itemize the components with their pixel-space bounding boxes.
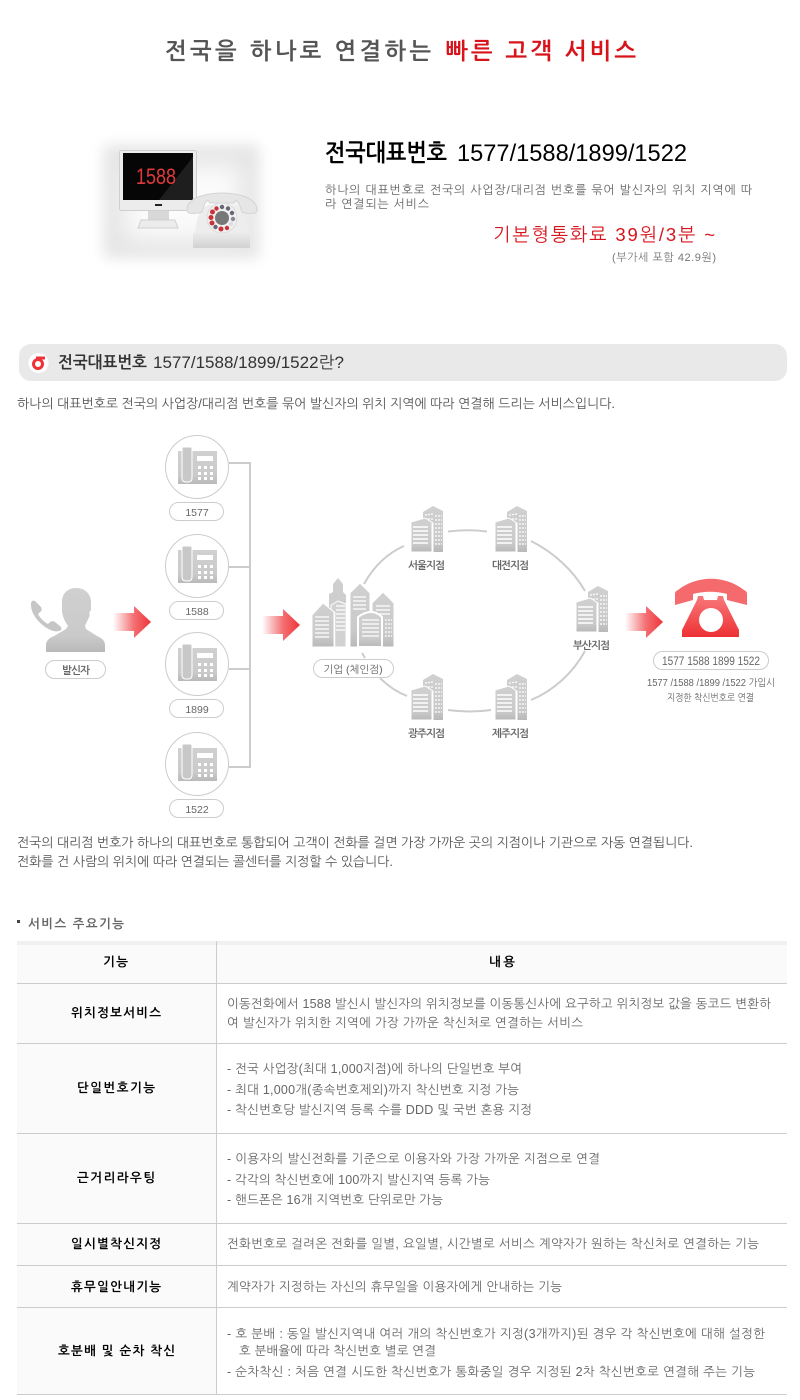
section intro: 하나의 대표번호로 전국의 사업장/대리점 번호를 묶어 발신자의 위치 지역에 따라 연결해 드리는 서비스입니다. [17, 396, 615, 411]
diagram explanation: 전국의 대리점 번호가 하나의 대표번호로 통합되어 고객이 전화를 걸면 가장 가까운 곳의 지점이나 기관으로 자동 연결됩니다. [17, 835, 693, 850]
diagram explanation [17, 835, 693, 869]
product description: 하나의 대표번호로 전국의 사업장/대리점 번호를 묶어 발신자의 위치 지역에 따 [325, 183, 752, 197]
branch: Jeju: 제주지점 [492, 727, 529, 740]
row: single number: - 착신번호당 발신지역 등록 수를 DDD 및 국번 혼용 지정 [227, 1103, 532, 1117]
icon: headquarters buildings [312, 578, 394, 647]
ring [362, 530, 585, 712]
branch: Seoul: 서울지점 [408, 559, 445, 572]
title: 전국을 하나로 연결하는 [165, 38, 431, 64]
row: location: 위치정보서비스 [71, 1006, 161, 1020]
row: location: 여 발신자가 위치한 지역에 가장 가까운 착신처로 연결하는 서비스 [227, 1016, 583, 1030]
phone 1588: 1588 [185, 606, 209, 618]
row: routing: 근거리라우팅 [77, 1171, 155, 1185]
row: single number: - 전국 사업장(최대 1,000지점)에 하나의 단일번호 부여 [227, 1062, 522, 1076]
branch: Daejeon [492, 506, 529, 572]
number pill: 1577 1588 1899 1522 [662, 656, 760, 668]
row: routing: - 핸드폰은 16개 지역번호 단위로만 가능 [227, 1193, 443, 1207]
phone 1899 [166, 632, 228, 718]
arrow [625, 606, 663, 638]
row: location: 이동전화에서 1588 발신시 발신자의 위치정보를 이동통신사에 요구하고 위치정보 값을 동코드 변환하 [227, 997, 771, 1011]
phone 1899: 1899 [185, 704, 209, 716]
table header [103, 955, 515, 969]
row: schedule: 일시별착신지정 [71, 1237, 161, 1251]
row: distribution: 호 분배율에 따라 착신번호 별로 연결 [239, 1344, 436, 1358]
row: distribution [58, 1327, 765, 1379]
row: single number: 단일번호기능 [77, 1081, 155, 1095]
icon: caller [31, 588, 105, 652]
phone 1577: 1577 [185, 507, 209, 519]
row: distribution: - 순차착신 : 처음 연결 시도한 착신번호가 통화중일 경우 지정된 2차 착신번호로 연결해 주는 기능 [227, 1365, 755, 1379]
caller label [46, 660, 106, 678]
phone 1522: 1522 [185, 804, 209, 816]
number pill [654, 652, 768, 670]
branch: Daejeon: 대전지점 [492, 559, 529, 572]
branch: Jeju [492, 674, 529, 740]
feature table [17, 941, 787, 1394]
HQ label [314, 660, 394, 678]
row: schedule: 전화번호로 걸려온 전화를 일별, 요일별, 시간별로 서비스 계약자가 원하는 착신처로 연결하는 기능 [227, 1237, 759, 1251]
title [165, 38, 636, 64]
branch: Busan: 부산지점 [573, 639, 610, 652]
illustration: monitor and telephone: 1588 [136, 164, 176, 189]
illustration: monitor and telephone [104, 145, 259, 258]
branch: Seoul [408, 506, 445, 572]
product description [325, 183, 752, 211]
row: single number [77, 1062, 532, 1117]
branch: Gwangju [408, 674, 445, 740]
table header: 내용 [489, 955, 515, 969]
diagram note: 지정한 착신번호로 연결 [667, 692, 754, 704]
phone 1522 [166, 732, 228, 818]
product heading: 전국대표번호 [325, 140, 447, 167]
table header: 기능 [103, 955, 128, 969]
feature heading: 서비스 주요기능 [28, 917, 124, 931]
diagram explanation: 전화를 건 사람의 위치에 따라 연결되는 콜센터를 지정할 수 있습니다. [17, 854, 393, 869]
row: routing: - 각각의 착신번호에 100까지 발신지역 등록 가능 [227, 1173, 490, 1187]
row: holiday: 휴무일안내기능 [71, 1280, 161, 1294]
row: holiday [71, 1280, 562, 1294]
caller label: 발신자 [62, 665, 90, 677]
row: single number: - 최대 1,000개(종속번호제외)까지 착신번호 지정 가능 [227, 1083, 519, 1097]
phone 1577 [166, 436, 228, 520]
connector [229, 463, 250, 767]
section bar [19, 344, 787, 381]
row: routing [77, 1152, 600, 1207]
row: distribution: 호분배 및 순차 착신 [58, 1344, 175, 1358]
row: holiday: 계약자가 지정하는 자신의 휴무일을 이용자에게 안내하는 기능 [227, 1280, 562, 1294]
product heading [325, 140, 687, 167]
row: routing: - 이용자의 발신전화를 기준으로 이용자와 가장 가까운 지점으로 연결 [227, 1152, 600, 1166]
diagram note [647, 677, 775, 704]
phone 1588 [166, 534, 228, 620]
branch: Busan [573, 586, 610, 652]
row: location [71, 997, 771, 1030]
section bar: 1577/1588/1899/1522란? [153, 354, 344, 372]
product description: 라 연결되는 서비스 [325, 197, 429, 211]
price: 기본형통화료 39원/3분 ~ [493, 224, 715, 245]
section bar: 전국대표번호 [58, 354, 147, 372]
HQ label: 기업 (체인점) [323, 664, 383, 676]
diagram [31, 436, 775, 818]
VAT note: (부가세 포함 42.9원) [612, 251, 716, 264]
arrow [262, 609, 300, 641]
branch: Gwangju: 광주지점 [408, 727, 445, 740]
row: distribution: - 호 분배 : 동일 발신지역내 여러 개의 착신번호가 지정(3개까지)된 경우 각 착신번호에 대해 설정한 [227, 1327, 765, 1341]
icon: brand logo [28, 353, 48, 373]
product heading: 1577/1588/1899/1522 [457, 140, 687, 167]
title: 빠른 고객 서비스 [446, 38, 636, 64]
arrow [113, 606, 151, 638]
icon: red telephone [675, 579, 747, 637]
diagram note: 1577 /1588 /1899 /1522 가입시 [647, 677, 775, 689]
